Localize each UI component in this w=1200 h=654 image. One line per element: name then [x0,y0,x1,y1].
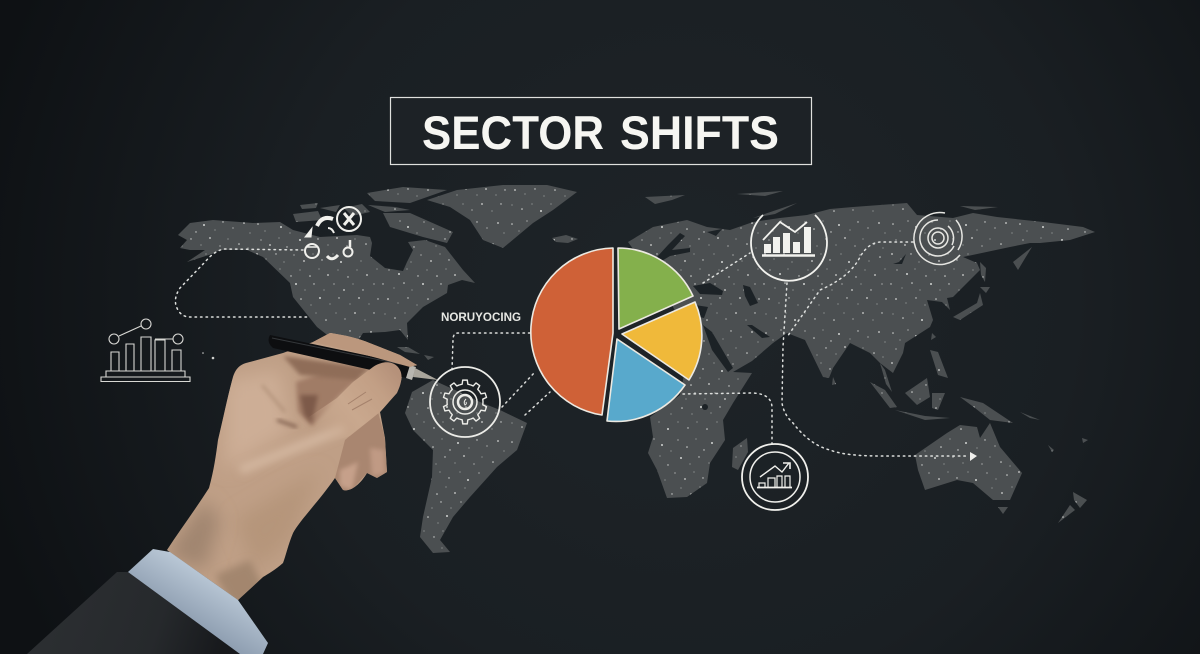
icon: left bar chart [101,319,190,382]
northern islands [645,191,998,218]
caribbean islands [397,347,434,360]
greenland [427,185,577,248]
connector: gear to pie [502,372,535,407]
connector: concentric icon to asia [787,242,913,337]
north america [178,220,475,345]
icon: north america process cycle [305,207,361,259]
dotted connectors [175,242,968,456]
slice: green [618,248,693,329]
inland seas [657,229,906,410]
icon: gear in circle [430,367,500,437]
connector: chart to australia [782,283,968,456]
shirt cuff [128,549,268,654]
world map [178,185,1095,553]
iceland [552,235,578,243]
icon: top-right bar chart in circle [751,215,827,281]
connector: pie to top-right chart [703,253,750,283]
knuckle crease [277,420,297,427]
japan [953,287,990,320]
title text: SHIFTS [620,106,779,159]
south america [405,380,527,553]
icon: bottom growth chart in circle [742,444,808,510]
index finger [313,333,417,367]
slice: blue [607,339,685,421]
southeast asia islands [832,333,1013,423]
stray map dots [202,352,214,359]
pie chart [531,248,702,421]
eurasia and africa [628,203,1095,498]
thumb [297,362,402,446]
connector: label to gear [452,333,530,370]
australia [915,423,1022,500]
new zealand [1058,492,1087,523]
hand [165,333,417,610]
connector: pie to bottom chart [683,393,772,443]
kamchatka and sakhalin [980,247,1032,282]
hand with pen [165,333,438,610]
connector: north america loop [175,249,310,317]
thumb creases [348,392,372,410]
slice: red [531,248,613,415]
slice: yellow [622,302,702,380]
connector: south america to pie [525,392,550,415]
madagascar [732,438,748,470]
finger hollow [294,376,358,426]
icon: concentric circles [914,212,962,264]
arrow head: australia [970,452,977,461]
title text: SECTOR [422,106,604,159]
suit sleeve [27,572,240,654]
pie label: NORUYOCING [441,312,521,324]
pacific islets [1020,412,1088,452]
title box [390,98,812,164]
lower fingers [335,412,387,492]
pen [269,335,438,380]
tasmania [998,507,1008,514]
arctic islands [293,187,453,243]
